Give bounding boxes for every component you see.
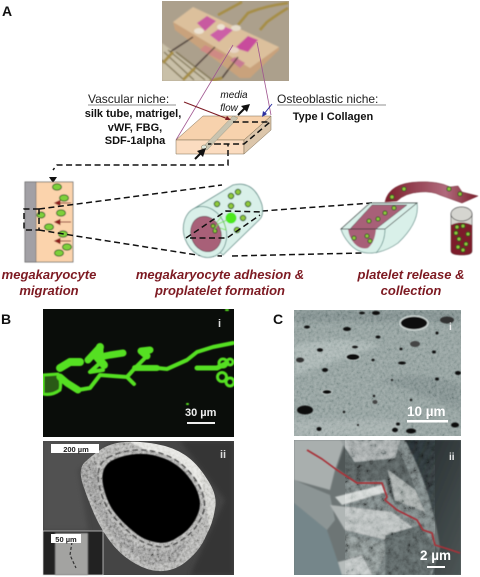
text: vascular niche components: vWF, FBG,	[108, 122, 162, 134]
photo of silk bioreactor device	[162, 1, 289, 81]
arrowhead into migration panel	[49, 177, 57, 183]
caption: megakaryocyte migration: migration	[19, 283, 79, 298]
arrow: osteoblastic niche pointer	[262, 104, 272, 117]
curved collection arrow	[385, 182, 478, 203]
caption: adhesion and proplatelet formation	[136, 267, 304, 298]
heading: osteoblastic niche: Osteoblastic niche:	[277, 92, 378, 106]
label: media flow	[220, 90, 248, 114]
scale bar 2 um: 2 µm	[420, 548, 451, 563]
silk tube channel	[201, 116, 238, 150]
text: vascular niche components: SDF-1alpha	[105, 135, 166, 147]
scale bar 10 um: 10 µm	[407, 404, 446, 419]
collection tube	[451, 207, 472, 255]
panel label B: B	[1, 311, 11, 327]
caption: megakaryocyte migration	[2, 267, 96, 298]
caption: platelet release and collection	[357, 267, 464, 298]
panel label C: C	[273, 311, 283, 327]
caption: platelet release and collection: platelet release &	[357, 267, 464, 282]
dashed cut lines on device	[53, 122, 270, 170]
panel B i: fluorescence micrograph	[43, 309, 234, 437]
label: media flow: media	[220, 90, 248, 101]
caption: megakaryocyte migration: megakaryocyte	[2, 267, 96, 282]
migration schematic	[25, 182, 73, 262]
device block schematic	[176, 116, 271, 154]
connector lines from photo to device block	[176, 42, 271, 140]
scale label 200 um: 200 µm	[63, 445, 89, 454]
dashed zoom box	[24, 209, 39, 230]
panel B ii: SEM of silk tube	[43, 436, 234, 576]
text: type I collagen: Type I Collagen	[293, 111, 374, 123]
inset SEM with 50 um label: 50 µm	[55, 535, 77, 544]
text: vascular niche components	[85, 108, 181, 147]
panel label A: A	[2, 3, 12, 19]
tube schematic	[176, 184, 263, 264]
label ii: ii	[220, 449, 226, 461]
scale bar 30 um: 30 µm	[185, 407, 217, 419]
label i: i	[449, 322, 452, 333]
arrows: media flow	[195, 104, 250, 159]
text: vascular niche components: silk tube, matrigel,	[85, 108, 181, 120]
arrow: vascular niche pointer	[184, 102, 231, 120]
scale label 200 um	[51, 444, 99, 454]
half tube schematic	[341, 203, 417, 253]
label ii: ii	[449, 452, 455, 463]
label: media flow: flow	[220, 103, 239, 114]
panel C ii: tube wall cross-section SEM	[294, 440, 461, 577]
panel C i: porous surface SEM	[294, 310, 461, 436]
inset SEM with 50 um label	[43, 531, 103, 575]
caption: adhesion and proplatelet formation: megakaryocyte adhesion &	[136, 267, 304, 282]
label i: i	[218, 318, 221, 330]
heading: vascular niche: Vascular niche:	[88, 92, 169, 106]
caption: platelet release and collection: collection	[381, 283, 441, 298]
caption: adhesion and proplatelet formation: proplatelet formation	[154, 283, 285, 298]
dashed zoom lines to tube	[39, 185, 372, 256]
